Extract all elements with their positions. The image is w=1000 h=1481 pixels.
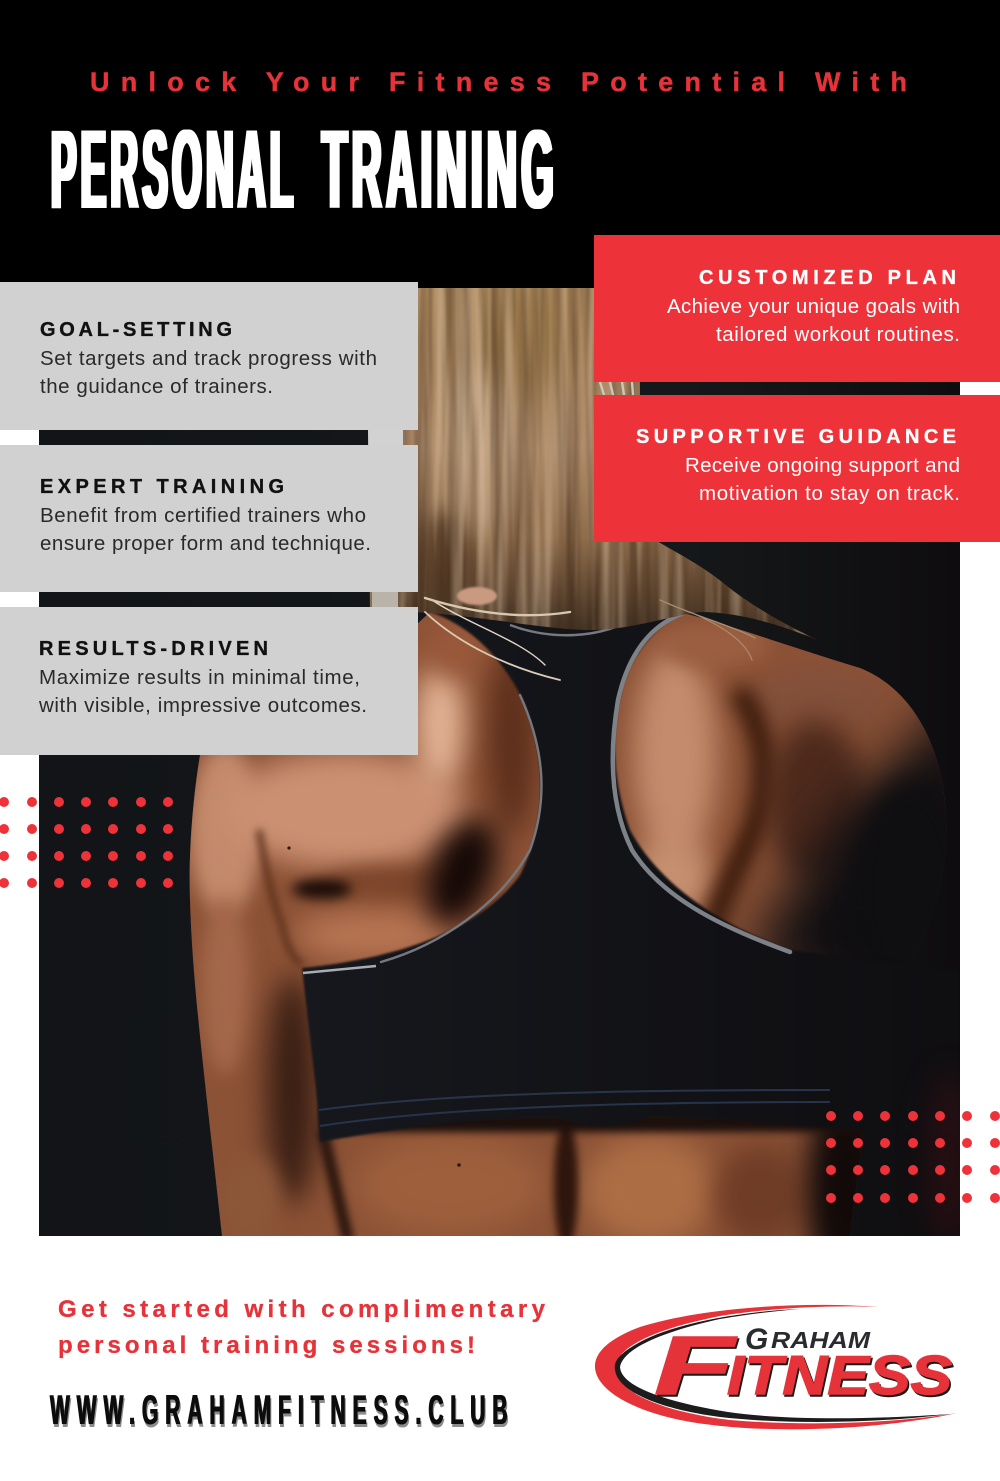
logo wordmark fitness: ITNESS bbox=[727, 1344, 952, 1406]
panel: expert training: ensure proper form and technique. bbox=[40, 532, 371, 555]
bra hem stripes bbox=[319, 1090, 830, 1110]
call to action: personal training sessions! bbox=[58, 1332, 475, 1359]
logo wordmark fitness: F bbox=[654, 1319, 738, 1412]
panel: supportive guidance: SUPPORTIVE GUIDANCE bbox=[636, 426, 956, 448]
bra right grey trim bbox=[613, 613, 790, 952]
panel: results-driven: RESULTS-DRIVEN bbox=[39, 638, 268, 660]
logo red swoosh bbox=[595, 1305, 957, 1429]
panel: customized plan: Achieve your unique goals with bbox=[667, 295, 960, 318]
skin shading bbox=[189, 613, 990, 1280]
panel: expert training: Benefit from certified trainers who bbox=[40, 504, 366, 527]
torso skin bbox=[190, 613, 946, 1236]
logo: graham fitness bbox=[595, 1305, 957, 1429]
logo black inner swoosh bbox=[615, 1309, 950, 1422]
panel: supportive guidance: Receive ongoing support and bbox=[685, 454, 960, 477]
bra left grey trim bbox=[381, 695, 541, 962]
logo wordmark fitness bbox=[654, 1319, 952, 1412]
lower back muscles bbox=[355, 1135, 545, 1235]
panel: results-driven: Maximize results in minimal time, bbox=[39, 666, 360, 689]
call to action bbox=[58, 1296, 546, 1359]
panel: supportive guidance: motivation to stay on track. bbox=[699, 482, 960, 505]
logo wordmark graham: RAHAM bbox=[771, 1327, 871, 1353]
photo: woman's muscular back in sports bra bbox=[39, 280, 990, 1280]
panel: customized plan: tailored workout routines. bbox=[716, 323, 960, 346]
black header band bbox=[0, 0, 1000, 288]
panel: results-driven: with visible, impressive outcomes. bbox=[38, 694, 367, 717]
headline: unlock your fitness potential with: Unlock Your Fitness Potential With bbox=[90, 67, 907, 97]
panel: customized plan bbox=[594, 235, 1000, 382]
title: personal training: PERSONAL bbox=[51, 106, 293, 232]
photo dark backdrop bbox=[39, 288, 960, 1236]
shoulder falling into shadow bbox=[730, 696, 946, 1236]
panel: results-driven bbox=[0, 607, 418, 755]
panel: goal-setting bbox=[0, 282, 418, 430]
pale hair seen in left gaps bbox=[368, 430, 403, 445]
dot grid: right bbox=[826, 1111, 1000, 1203]
neckline trim bbox=[510, 624, 616, 636]
sports bra bbox=[302, 612, 960, 1142]
arm and torso crease bbox=[259, 830, 302, 965]
blonde hair bbox=[368, 280, 828, 643]
panel: goal-setting: GOAL-SETTING bbox=[40, 319, 232, 341]
panel: goal-setting: Set targets and track progress with bbox=[40, 347, 377, 370]
website url: WWW.GRAHAMFITNESS.CLUB bbox=[50, 1387, 507, 1434]
panel: customized plan: CUSTOMIZED PLAN bbox=[699, 267, 956, 289]
panel: expert training: EXPERT TRAINING bbox=[40, 476, 284, 498]
reddish glow at lower right bbox=[923, 1077, 960, 1236]
neck skin bbox=[457, 587, 497, 605]
logo wordmark graham bbox=[745, 1323, 871, 1356]
call to action: Get started with complimentary bbox=[58, 1296, 546, 1323]
dot grid: left bbox=[0, 797, 173, 888]
hair wisps bbox=[425, 382, 755, 680]
title: personal training: TRAINING bbox=[322, 107, 554, 232]
panel: supportive guidance bbox=[594, 395, 1000, 542]
title: personal training bbox=[51, 106, 554, 232]
panel: expert training bbox=[0, 445, 418, 592]
small moles bbox=[287, 846, 461, 1167]
logo wordmark graham: G bbox=[745, 1323, 768, 1356]
panel: goal-setting: the guidance of trainers. bbox=[40, 375, 273, 398]
